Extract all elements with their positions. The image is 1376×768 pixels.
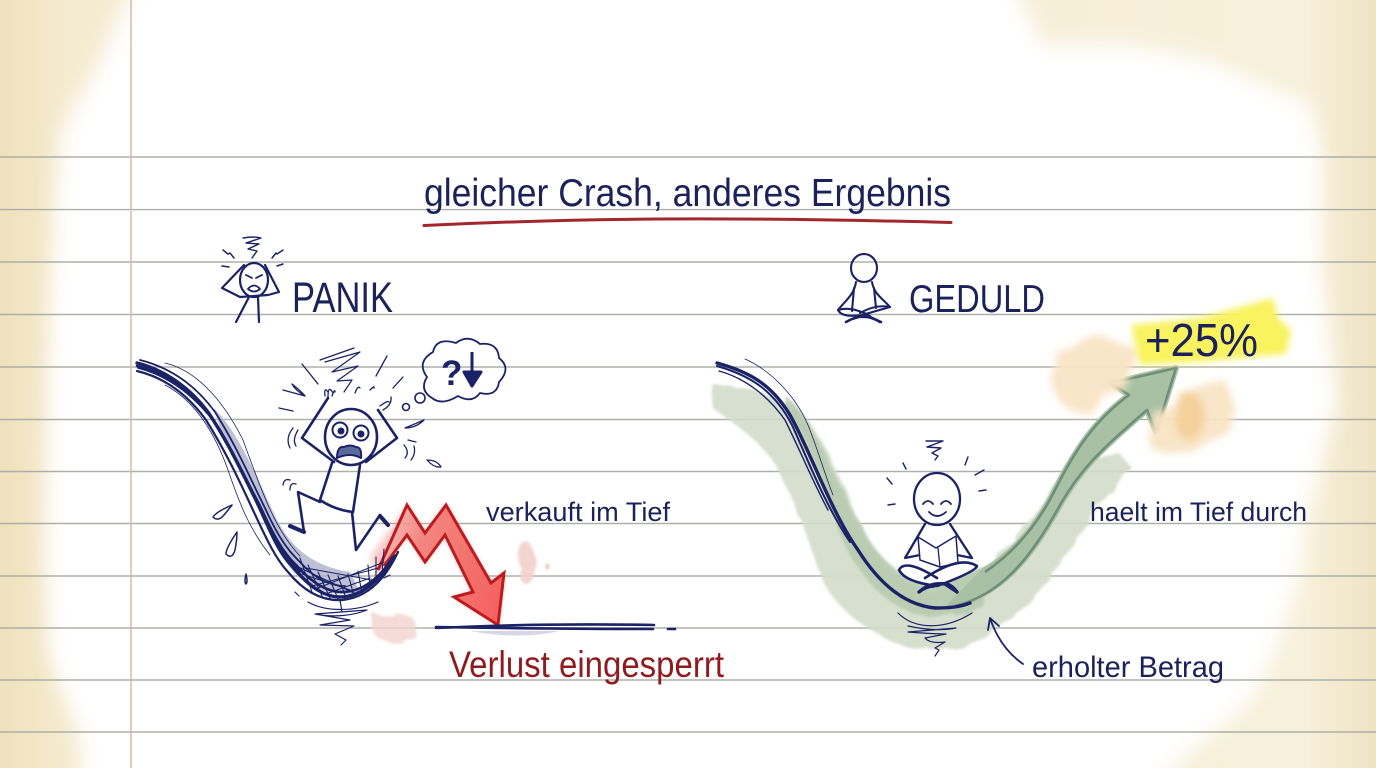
- result highlight: [1131, 298, 1291, 366]
- chart: recovery curve: [712, 359, 1176, 656]
- title: gleicher Crash, anderes Ergebnis: [424, 172, 951, 215]
- title underline: [424, 219, 951, 226]
- panel: Geduld: [712, 254, 1307, 684]
- arrow: pointer to recovered amount: [988, 618, 1023, 664]
- heading: geduld: GEDULD: [909, 278, 1045, 321]
- icon: panicking person: [222, 237, 283, 322]
- calm spring: [898, 613, 972, 656]
- label: recovered amount: erholter Betrag: [1032, 651, 1224, 684]
- label: sold at bottom: verkauft im Tief: [486, 497, 670, 527]
- wash blots: [372, 542, 550, 644]
- icon: meditating person: [838, 254, 890, 322]
- heading: panik: PANIK: [292, 274, 393, 322]
- navy curve: [717, 359, 970, 608]
- icon: thought bubble: [402, 339, 506, 410]
- panel: Panik: [137, 237, 725, 685]
- result highlight: +25%: [1145, 314, 1258, 366]
- stick figure panicking: [279, 348, 441, 550]
- watercolor band: [712, 385, 1131, 649]
- stick figure reading: [887, 441, 986, 592]
- impact spring: [295, 575, 390, 645]
- chart: crash curve: [137, 360, 398, 645]
- icon: thought bubble: ?: [441, 354, 462, 393]
- sweat drops: [213, 505, 247, 584]
- label: holds through bottom: haelt im Tief durch: [1090, 497, 1307, 527]
- label: locked-in loss: Verlust eingesperrt: [449, 644, 725, 685]
- orange wash blots: [1053, 335, 1234, 453]
- green rising arrow: [950, 368, 1176, 606]
- flat loss line: [436, 624, 675, 636]
- arrow: red falling arrow: [370, 505, 504, 625]
